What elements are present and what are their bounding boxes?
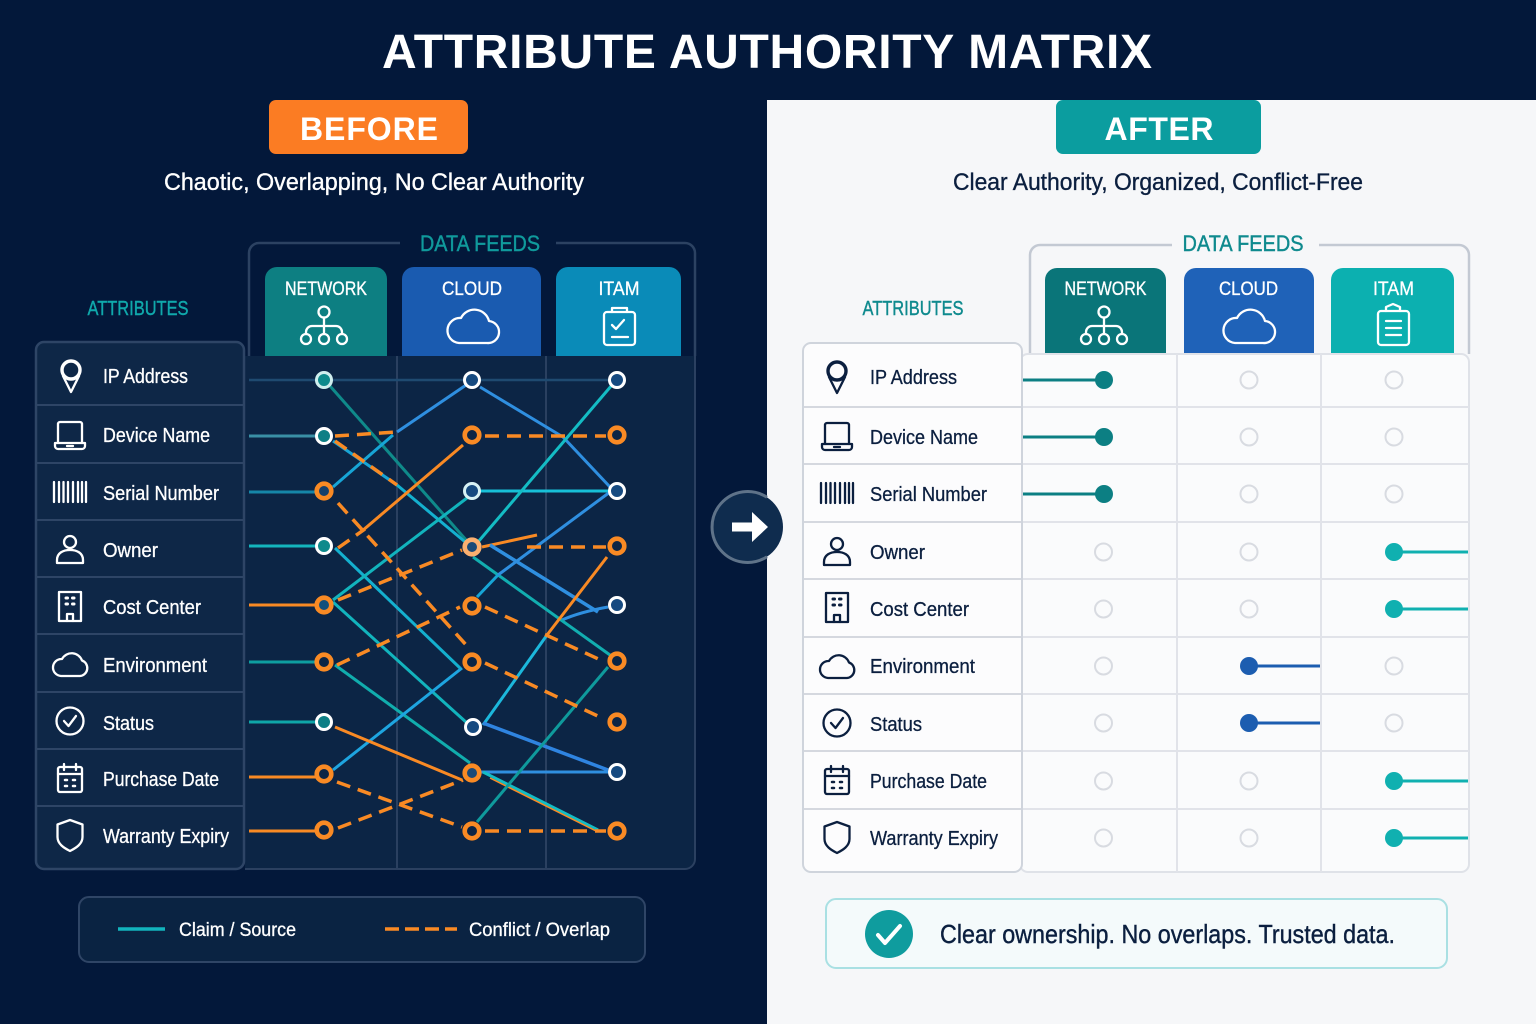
attribute list: after xyxy=(803,343,1022,872)
attribute list: before xyxy=(36,342,244,869)
feed header: network: NETWORK xyxy=(1064,279,1147,300)
row: ip address: IP Address xyxy=(870,367,957,389)
row: owner xyxy=(824,538,925,565)
claims: cloud xyxy=(1240,657,1320,732)
row: purchase date xyxy=(58,764,219,792)
attribute stubs xyxy=(249,380,617,831)
panel: before xyxy=(36,100,695,962)
row: environment xyxy=(820,655,975,678)
subtitle: before: Chaotic, Overlapping, No Clear Authority xyxy=(164,169,584,196)
heading: attributes: ATTRIBUTES xyxy=(88,298,188,320)
heading: data feeds: DATA FEEDS xyxy=(420,231,540,256)
row: ip address xyxy=(828,362,957,393)
feed header: cloud xyxy=(1184,268,1314,354)
row: warranty expiry xyxy=(58,820,229,851)
badge: after xyxy=(1056,100,1261,154)
row: owner xyxy=(57,536,158,563)
title: ATTRIBUTE AUTHORITY MATRIX xyxy=(382,26,1152,79)
feed header: network: NETWORK xyxy=(285,279,367,300)
row: ip address xyxy=(62,361,188,392)
nodes: network column xyxy=(316,372,332,837)
feed header: itam: ITAM xyxy=(598,279,640,300)
claims: network xyxy=(1022,371,1113,503)
feed header: itam: ITAM xyxy=(1373,279,1414,300)
matrix panel: chaotic links xyxy=(245,356,695,869)
badge: before: BEFORE xyxy=(300,111,438,147)
feed header: itam xyxy=(1331,268,1454,354)
feed header: cloud xyxy=(402,267,541,356)
row: serial number: Serial Number xyxy=(103,483,219,505)
row: cost center: Cost Center xyxy=(870,599,969,621)
legend xyxy=(79,897,645,962)
row: device name xyxy=(55,422,210,449)
background: after side xyxy=(767,100,1536,1024)
row: status xyxy=(824,710,922,736)
empty cells xyxy=(1095,372,1402,846)
row: cost center xyxy=(826,593,969,622)
row: owner: Owner xyxy=(103,540,158,562)
feed header: network xyxy=(1045,268,1166,354)
row: serial number: Serial Number xyxy=(870,484,987,506)
legend: Claim / Source xyxy=(179,920,296,941)
claims: itam xyxy=(1385,543,1468,847)
row: warranty expiry: Warranty Expiry xyxy=(103,826,229,848)
row: status: Status xyxy=(870,714,922,736)
row: owner: Owner xyxy=(870,542,925,564)
row: warranty expiry xyxy=(824,822,998,853)
icon: clipboard xyxy=(604,308,635,345)
row: cost center xyxy=(59,592,201,621)
legend: Conflict / Overlap xyxy=(469,920,610,941)
row: purchase date: Purchase Date xyxy=(870,771,987,793)
row: device name: Device Name xyxy=(103,425,210,447)
links: conflicts xyxy=(335,432,606,831)
row: warranty expiry: Warranty Expiry xyxy=(870,828,998,850)
nodes: itam column xyxy=(610,372,624,838)
row: serial number xyxy=(54,482,219,505)
arrow: before to after xyxy=(712,492,783,562)
row: device name: Device Name xyxy=(870,427,978,449)
nodes: cloud column xyxy=(464,372,480,838)
feed header: network xyxy=(265,267,387,356)
icon: clipboard xyxy=(1378,304,1409,345)
heading: data feeds: DATA FEEDS xyxy=(1182,231,1304,256)
row: purchase date: Purchase Date xyxy=(103,769,219,791)
links: claims, cloud to itam xyxy=(473,385,612,831)
feed header: itam xyxy=(556,267,681,356)
row: device name xyxy=(822,423,978,450)
row: status: Status xyxy=(103,713,154,735)
matrix table: clear ownership xyxy=(1020,354,1469,872)
badge: before xyxy=(269,100,468,154)
subtitle: after: Clear Authority, Organized, Conflict-Free xyxy=(953,169,1363,196)
row: environment: Environment xyxy=(103,655,207,677)
feed header: cloud: CLOUD xyxy=(442,279,502,300)
row: status xyxy=(56,708,154,735)
row: environment: Environment xyxy=(870,656,975,678)
panel: after xyxy=(803,100,1469,968)
heading: attributes: ATTRIBUTES xyxy=(862,298,964,320)
row: ip address: IP Address xyxy=(103,366,188,388)
row: cost center: Cost Center xyxy=(103,597,201,619)
callout: Clear ownership. No overlaps. Trusted data. xyxy=(940,919,1395,949)
badge: after: AFTER xyxy=(1104,111,1214,147)
icon: check xyxy=(865,910,913,958)
links: claims, network to cloud xyxy=(330,381,472,780)
callout xyxy=(826,899,1447,968)
feed header: cloud: CLOUD xyxy=(1219,279,1278,300)
row: serial number xyxy=(821,483,987,506)
row: purchase date xyxy=(825,766,987,794)
row: environment xyxy=(53,653,207,677)
